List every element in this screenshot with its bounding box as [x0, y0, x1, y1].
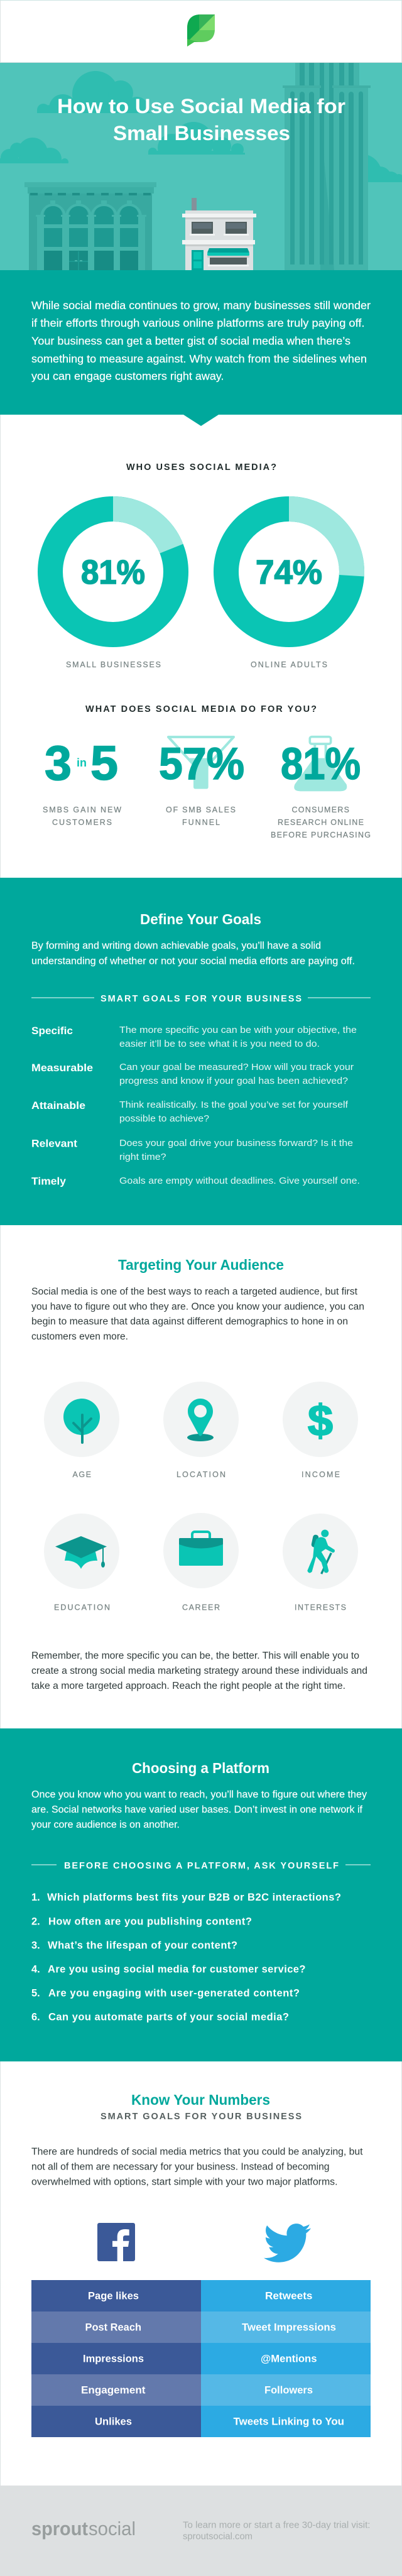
heading: know your numbers: Know Your Numbers — [131, 2092, 270, 2108]
panel: define your goals — [0, 878, 402, 1225]
title: How to Use Social Media for — [57, 95, 345, 117]
heading: who uses social media: WHO USES SOCIAL MEDIA? — [126, 462, 276, 472]
donut chart: 81% small businesses — [50, 496, 183, 635]
table: twitter metrics: @Mentions — [261, 2354, 317, 2365]
table: twitter metrics — [201, 2280, 371, 2437]
label: of SMB sales funnel — [166, 805, 236, 827]
label: interests: INTERESTS — [295, 1603, 346, 1612]
icon: facebook — [97, 2223, 135, 2261]
numbered questions: 2. — [31, 1916, 40, 1928]
paragraph: metrics: There are hundreds of social media metrics that you could be analyzing, but — [31, 2146, 363, 2158]
stat: 3 in 5: 5 — [90, 736, 118, 790]
goal: specific: Specific — [31, 1025, 73, 1037]
icon: education cap — [44, 1514, 119, 1589]
call to action: To learn more or start a free 30-day trial visit: — [183, 2519, 371, 2531]
icon: interests hiker — [283, 1514, 358, 1589]
numbered questions: 4. — [31, 1964, 40, 1975]
sprout social wordmark: social — [89, 2518, 136, 2540]
icon: flask — [294, 737, 347, 791]
paragraph: targeting intro: you have to figure out who they are. Once you know your audience, you can — [31, 1302, 364, 1312]
label: small businesses: SMALL BUSINESSES — [66, 660, 161, 669]
footer — [0, 2486, 402, 2576]
logo: Sprout leaf speech bubble — [187, 14, 215, 50]
paragraph: By forming and writing down achievable goals, you’ll have a solid — [31, 941, 321, 951]
label: location: LOCATION — [177, 1470, 225, 1479]
icon: income dollar: $ — [308, 1396, 333, 1445]
table: twitter metrics: Retweets — [265, 2291, 313, 2302]
table: facebook metrics: Engagement — [81, 2385, 146, 2396]
label: consumers research online before purchasing: CONSUMERS — [291, 805, 349, 814]
paragraph: Once you know who you want to reach, you’ll have to figure out where they — [31, 1789, 367, 1800]
intro text — [31, 299, 371, 382]
icon: location pin — [163, 1382, 239, 1457]
paragraph: metrics: overwhelmed with options, start simple with your two major platforms. — [31, 2176, 338, 2188]
cloud: left — [0, 138, 68, 170]
intro text: While social media continues to grow, many businesses still wonder — [31, 299, 371, 312]
icon: funnel — [168, 737, 234, 789]
cloud: right behind tower — [340, 154, 402, 195]
goal: measurable: progress and know if your goal has been achieved? — [119, 1076, 348, 1086]
intro text: something to measure against. Why watch from the sidelines when — [31, 352, 367, 365]
stat: 57% with funnel icon: 57% — [159, 740, 244, 789]
goal: measurable: Measurable — [31, 1062, 93, 1074]
intro text: Your business can get a better gist of social media when there’s — [31, 334, 350, 347]
numbered questions: 5. — [31, 1988, 40, 1999]
goal: relevant: Does your goal drive your business forward? Is it the — [119, 1138, 353, 1149]
icon: career briefcase — [163, 1513, 239, 1588]
sprout social wordmark — [31, 2518, 136, 2540]
stat: 3 in 5 — [45, 736, 118, 790]
label: education: EDUCATION — [54, 1603, 110, 1612]
paragraph: targeting closing — [31, 1651, 367, 1691]
stat: 3 in 5: 3 — [45, 736, 72, 790]
goal: measurable — [31, 1062, 354, 1086]
icon: age tree — [44, 1382, 119, 1457]
numbered questions: What’s the lifespan of your content? — [48, 1940, 237, 1951]
label: age: AGE — [73, 1470, 91, 1479]
table: facebook metrics — [31, 2280, 201, 2437]
numbered questions: 1. — [31, 1892, 40, 1903]
intro panel — [0, 270, 402, 426]
paragraph: are. Social networks have varied user bases. Don’t invest in one network if — [31, 1804, 363, 1815]
numbered questions: Which platforms best fits your B2B or B2C interactions? — [47, 1892, 341, 1903]
goal: measurable: Can your goal be measured? How will you track your — [119, 1062, 354, 1072]
tower — [283, 63, 371, 270]
goal: specific: easier it’ll be to see what it is you need to do. — [119, 1039, 320, 1049]
paragraph: targeting closing: create a strong social media marketing strategy around these individuals and — [31, 1666, 367, 1676]
goal: attainable: possible to achieve? — [119, 1113, 209, 1124]
heading: Choosing a Platform — [132, 1760, 269, 1776]
table: facebook metrics: Impressions — [83, 2354, 144, 2365]
stat: 3 in 5: in — [77, 756, 87, 769]
heading: targeting your audience: Targeting Your Audience — [118, 1257, 284, 1273]
paragraph: targeting intro: Social media is one of the best ways to reach a targeted audience, but first — [31, 1287, 358, 1297]
label: online adults: ONLINE ADULTS — [251, 660, 327, 669]
goal: specific: The more specific you can be with your objective, the — [119, 1025, 357, 1035]
table: twitter metrics: Tweet Impressions — [242, 2322, 336, 2333]
subheading with rules: SMART GOALS FOR YOUR BUSINESS — [100, 994, 302, 1004]
label: income: INCOME — [302, 1470, 340, 1479]
paragraph: targeting intro — [31, 1287, 364, 1342]
numbered questions — [31, 1892, 341, 2023]
paragraph — [31, 941, 355, 966]
table: twitter metrics: Followers — [264, 2385, 313, 2396]
label: SMBs gain new customers: SMBS GAIN NEW — [43, 805, 121, 814]
goal: specific — [31, 1025, 357, 1049]
small storefront — [182, 198, 256, 270]
label: SMBs gain new customers: CUSTOMERS — [52, 818, 112, 827]
numbered questions: 3. — [31, 1940, 40, 1951]
label: consumers research online before purchasing: BEFORE PURCHASING — [271, 831, 371, 839]
intro text: you can engage customers right away. — [31, 369, 224, 382]
cloud: centre — [148, 122, 245, 162]
goal: timely — [31, 1175, 360, 1187]
intro text: if their efforts through various online platforms are truly paying off. — [31, 317, 364, 329]
paragraph: understanding of whether or not your social media efforts are paying off. — [31, 956, 355, 966]
table: facebook metrics: Page likes — [88, 2291, 139, 2302]
donut chart: 81% small businesses: 81% — [81, 554, 145, 591]
hero illustration — [0, 62, 402, 270]
table: twitter metrics: Tweets Linking to You — [234, 2416, 344, 2428]
numbered questions: Are you using social media for customer service? — [48, 1964, 305, 1975]
numbered questions: Can you automate parts of your social media? — [48, 2012, 289, 2023]
paragraph — [31, 1789, 367, 1830]
label: career: CAREER — [182, 1603, 220, 1612]
donut chart: 74% online adults: 74% — [256, 554, 322, 591]
call to action: sproutsocial.com — [183, 2531, 253, 2542]
stat: 81% with flask icon: 81% — [281, 740, 361, 789]
title — [57, 95, 345, 145]
title: Small Businesses — [113, 122, 290, 145]
goal: attainable: Think realistically. Is the goal you’ve set for yourself — [119, 1100, 349, 1110]
goal: relevant — [31, 1137, 353, 1162]
subheading with rules: BEFORE CHOOSING A PLATFORM, ASK YOURSELF — [64, 1861, 339, 1871]
paragraph: your core audience is on another. — [31, 1820, 180, 1830]
sprout social wordmark: sprout — [31, 2518, 88, 2540]
panel: choosing a platform — [0, 1728, 402, 2061]
paragraph: targeting intro: customers even more. — [31, 1331, 128, 1342]
label: SMBs gain new customers — [43, 805, 121, 827]
goal: timely: Timely — [31, 1175, 67, 1187]
call to action — [183, 2519, 371, 2542]
subheading: smart goals: SMART GOALS FOR YOUR BUSINESS — [100, 2112, 302, 2122]
paragraph: metrics — [31, 2146, 363, 2188]
goal: attainable: Attainable — [31, 1100, 85, 1111]
cloud: top centre — [37, 71, 151, 122]
numbered questions: 6. — [31, 2012, 40, 2023]
icon: income dollar — [283, 1382, 358, 1457]
label: consumers research online before purchasing: RESEARCH ONLINE — [278, 818, 364, 827]
paragraph: metrics: not all of them are necessary for your business. Instead of becoming — [31, 2161, 329, 2173]
label: of SMB sales funnel: OF SMB SALES — [166, 805, 236, 814]
label: of SMB sales funnel: FUNNEL — [182, 818, 220, 827]
goal: timely: Goals are empty without deadlines. Give yourself one. — [119, 1176, 360, 1186]
icon: twitter bird — [264, 2224, 311, 2262]
heading: Define Your Goals — [140, 911, 261, 927]
paragraph: targeting intro: begin to measure that data against different demographics to hone in on — [31, 1316, 348, 1327]
paragraph: targeting closing: take a more targeted approach. Reach the right people at the right time. — [31, 1681, 345, 1691]
donut chart: 74% online adults — [226, 496, 364, 635]
goal: relevant: right time? — [119, 1152, 166, 1162]
goal: attainable — [31, 1100, 349, 1124]
label: consumers research online before purchasing — [271, 805, 371, 839]
goal: relevant: Relevant — [31, 1137, 77, 1150]
paragraph: targeting closing: Remember, the more specific you can be, the better. This will enable you to — [31, 1651, 359, 1661]
heading: what does social media do for you: WHAT DOES SOCIAL MEDIA DO FOR YOU? — [85, 704, 317, 714]
table: facebook metrics: Post Reach — [85, 2322, 141, 2333]
table: facebook metrics: Unlikes — [95, 2416, 132, 2428]
numbered questions: Are you engaging with user-generated content? — [48, 1988, 300, 1999]
brick building — [24, 182, 156, 270]
numbered questions: How often are you publishing content? — [48, 1916, 252, 1928]
